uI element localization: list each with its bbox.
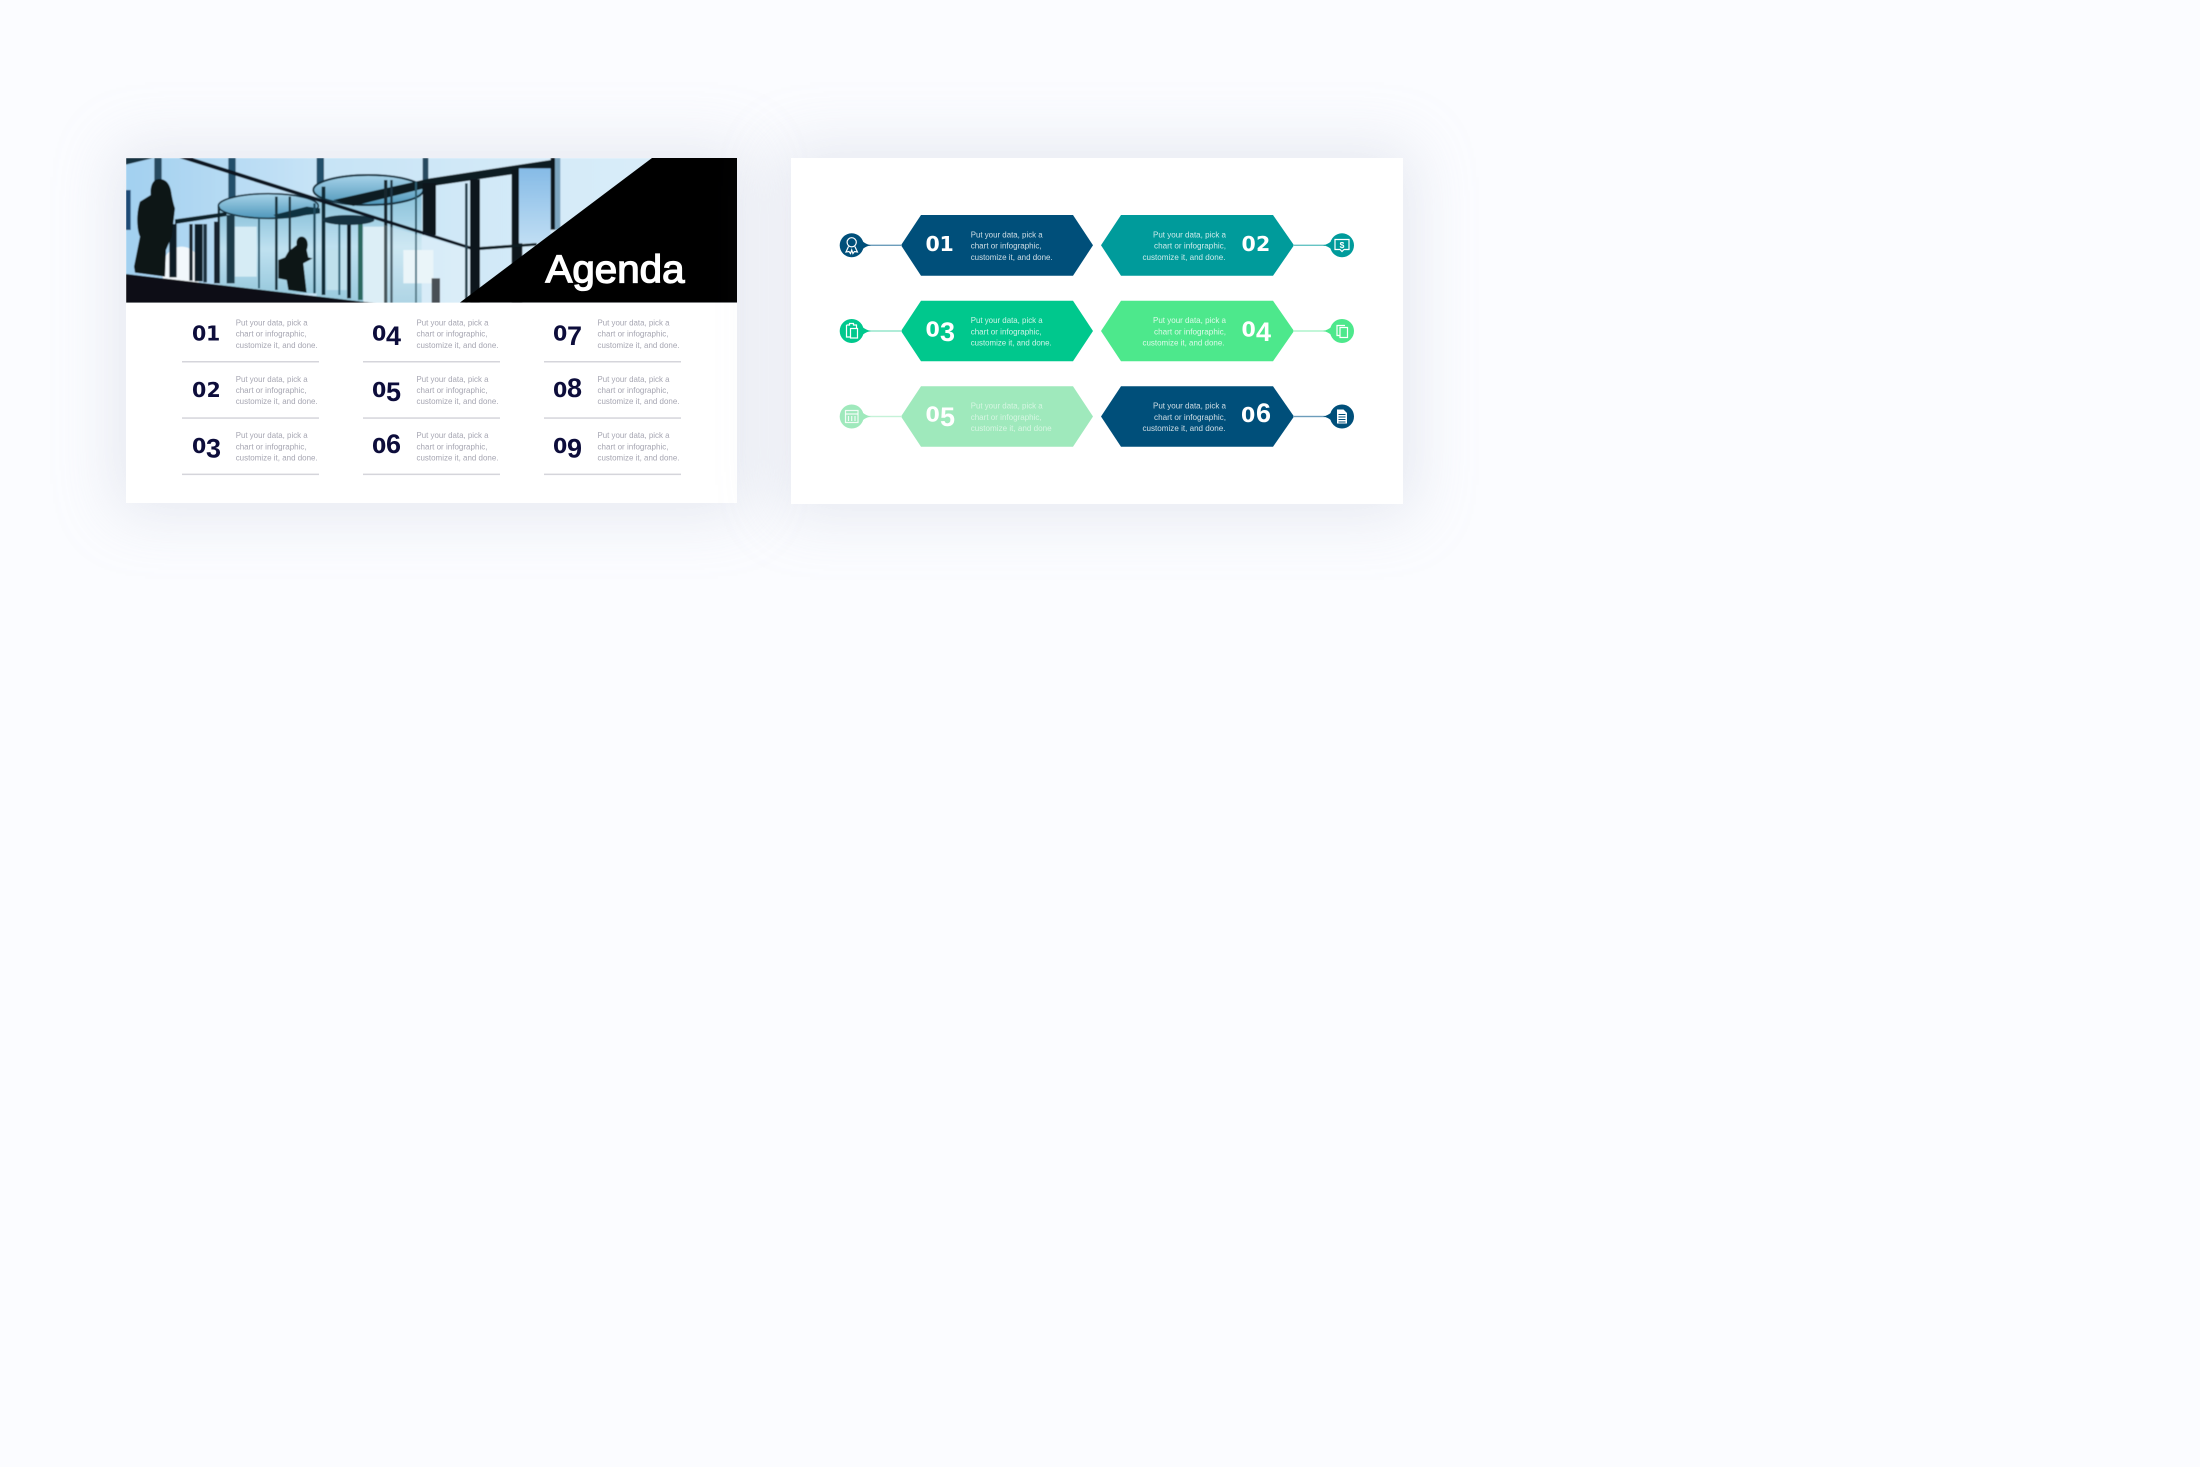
agenda item 06: Put your data, pick a — [416, 430, 489, 440]
agenda item 03: 0 — [192, 434, 206, 458]
step 04 hexagon: chart or infographic, — [1154, 326, 1226, 336]
agenda item 05: 5 — [386, 377, 401, 407]
step 04 hexagon: 4 — [1256, 317, 1271, 347]
step 04 hexagon: customize it, and done. — [1142, 338, 1224, 348]
step 02 hexagon: 0 — [1242, 232, 1256, 256]
step 01 hexagon: 1 — [940, 232, 954, 256]
agenda item 01: 1 — [206, 322, 220, 346]
connector and icon: document — [1293, 404, 1354, 428]
black diagonal title block — [460, 158, 737, 302]
step 06 hexagon: 0 — [1241, 403, 1255, 427]
step 04 hexagon — [1101, 301, 1294, 361]
agenda item 09: customize it, and done. — [598, 452, 680, 462]
agenda item 05: 0 — [372, 378, 386, 402]
agenda item 03: Put your data, pick a — [236, 430, 308, 440]
agenda item 08 — [544, 373, 681, 419]
agenda item 04 — [363, 318, 500, 362]
agenda item 05: Put your data, pick a — [416, 374, 489, 384]
agenda item 01 — [182, 318, 319, 362]
photo: revolving doors with silhouettes — [126, 158, 737, 305]
step 03 hexagon: customize it, and done. — [971, 338, 1052, 348]
step 04 hexagon: 0 — [1242, 318, 1256, 342]
agenda item 06: chart or infographic, — [416, 441, 488, 451]
agenda item 03: chart or infographic, — [236, 441, 307, 451]
agenda item 07 — [544, 318, 681, 362]
step 03 hexagon: Put your data, pick a — [971, 315, 1043, 325]
step 01 hexagon: Put your data, pick a — [971, 230, 1043, 240]
agenda item 02: chart or infographic, — [236, 385, 307, 395]
panel: hexagon process slide — [791, 158, 1403, 504]
agenda item 06: 0 — [372, 434, 386, 458]
step 05 hexagon — [901, 386, 1093, 447]
title: Agenda — [546, 248, 685, 292]
agenda item 09: Put your data, pick a — [598, 430, 670, 440]
agenda item 06: 6 — [386, 429, 401, 459]
step 01 hexagon: customize it, and done. — [971, 252, 1053, 262]
connector and icon: clipboard — [840, 319, 902, 343]
step 05 hexagon: Put your data, pick a — [971, 401, 1043, 411]
agenda item 02: customize it, and done. — [236, 396, 318, 406]
step 02 hexagon — [1101, 215, 1294, 276]
step 04 hexagon: Put your data, pick a — [1153, 315, 1226, 325]
agenda item 01: Put your data, pick a — [236, 318, 308, 328]
step 05 hexagon: 5 — [940, 402, 955, 432]
agenda item 06 — [363, 429, 500, 475]
step 01 hexagon: 0 — [926, 232, 940, 256]
agenda item 07: 7 — [567, 321, 582, 351]
step 02 hexagon: chart or infographic, — [1154, 241, 1226, 251]
agenda item 06: customize it, and done. — [416, 452, 498, 462]
connector and icon: dollar message: $ — [1340, 240, 1345, 250]
agenda item 08: 0 — [553, 378, 567, 402]
step 05 hexagon: 0 — [926, 403, 940, 427]
agenda item 08: chart or infographic, — [598, 385, 668, 395]
agenda item 07: chart or infographic, — [598, 329, 668, 339]
step 01 hexagon — [901, 215, 1093, 276]
step 03 hexagon: 3 — [940, 317, 955, 347]
step 02 hexagon: customize it, and done. — [1142, 252, 1226, 262]
agenda item 01: 0 — [192, 322, 206, 346]
agenda item 04: 0 — [372, 322, 386, 346]
agenda item 05 — [363, 374, 500, 419]
agenda item 04: 4 — [386, 321, 401, 351]
step 03 hexagon: chart or infographic, — [971, 326, 1042, 336]
step 05 hexagon: customize it, and done — [971, 423, 1052, 433]
connector and icon: copies — [1293, 319, 1354, 343]
agenda item 01: customize it, and done. — [236, 340, 318, 350]
step 06 hexagon — [1101, 386, 1294, 447]
agenda item 08: customize it, and done. — [598, 396, 680, 406]
agenda item 09: 9 — [567, 434, 582, 464]
connector and icon: medal — [840, 233, 902, 257]
step 01 hexagon: chart or infographic, — [971, 241, 1042, 251]
agenda item 01: chart or infographic, — [236, 329, 307, 339]
agenda item 04: customize it, and done. — [416, 340, 498, 350]
step 06 hexagon: chart or infographic, — [1154, 412, 1226, 422]
agenda item 03: customize it, and done. — [236, 452, 318, 462]
agenda item 03: 3 — [206, 434, 221, 464]
agenda item 08: 8 — [567, 373, 582, 403]
connector and icon: dollar message — [1293, 233, 1354, 257]
agenda item 07: customize it, and done. — [598, 340, 680, 350]
agenda item 09 — [544, 430, 681, 475]
step 02 hexagon: Put your data, pick a — [1153, 230, 1226, 240]
agenda item 09: chart or infographic, — [598, 441, 668, 451]
agenda item 03 — [182, 430, 319, 475]
agenda item 07: Put your data, pick a — [598, 318, 670, 328]
agenda item 04: chart or infographic, — [416, 329, 488, 339]
panel: agenda slide — [126, 158, 737, 503]
agenda item 02: 0 — [192, 378, 206, 402]
step 06 hexagon: customize it, and done. — [1142, 423, 1226, 433]
step 06 hexagon: 6 — [1256, 398, 1271, 428]
agenda item 05: chart or infographic, — [416, 385, 488, 395]
agenda item 02: Put your data, pick a — [236, 374, 308, 384]
step 03 hexagon — [901, 301, 1093, 361]
connector and icon: calendar — [840, 404, 902, 428]
step 05 hexagon: chart or infographic, — [971, 412, 1042, 422]
agenda item 09: 0 — [553, 434, 567, 458]
agenda item 04: Put your data, pick a — [416, 318, 489, 328]
agenda item 02: 2 — [206, 378, 221, 402]
agenda item 07: 0 — [553, 322, 567, 346]
agenda item 02 — [182, 374, 319, 419]
step 02 hexagon: 2 — [1256, 232, 1270, 256]
agenda item 05: customize it, and done. — [416, 396, 498, 406]
step 03 hexagon: 0 — [926, 318, 940, 342]
agenda item 08: Put your data, pick a — [598, 374, 670, 384]
step 06 hexagon: Put your data, pick a — [1153, 401, 1226, 411]
